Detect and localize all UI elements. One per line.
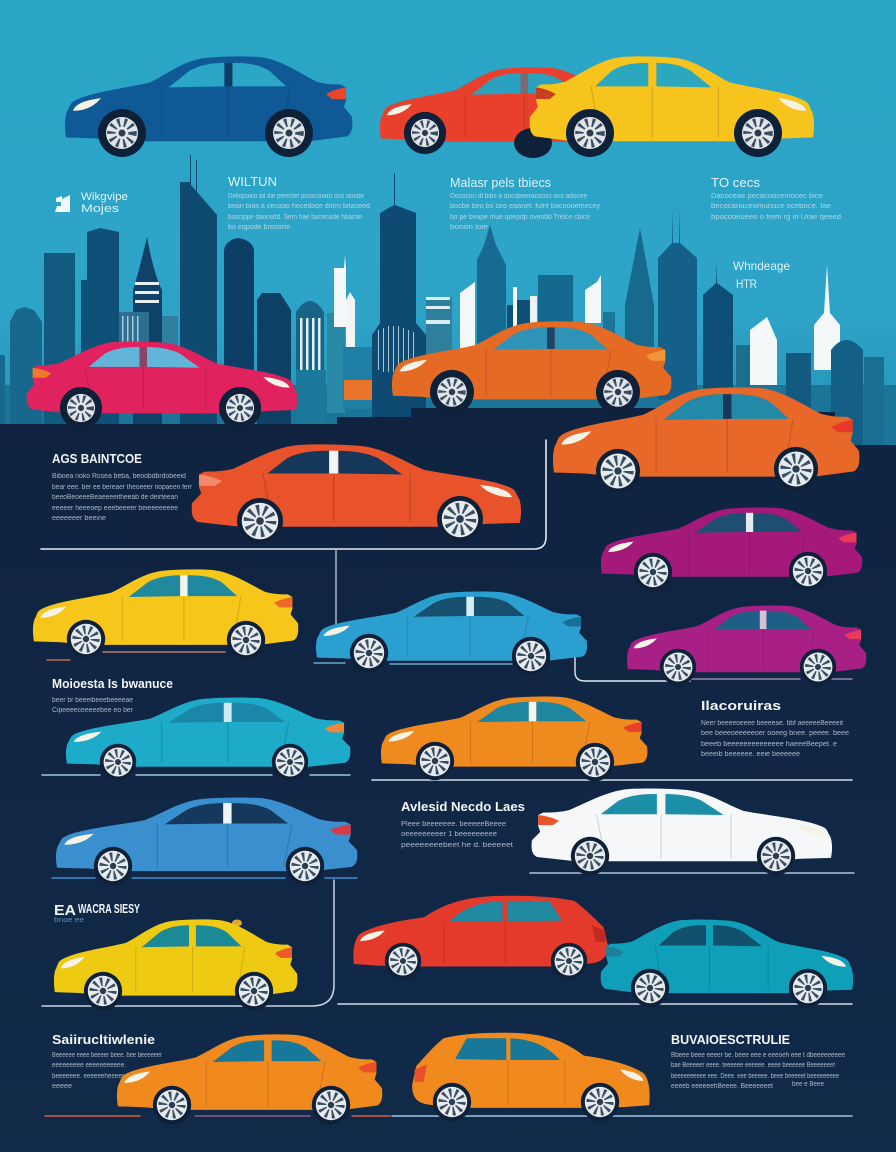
- car: large orange sedan: [553, 387, 859, 493]
- text block: Ilacoruiras: beeeb beeeeeeeeeeeeee haeeeBeepet. e: [701, 741, 837, 748]
- text block: Buvaioesctrulie: [671, 1032, 845, 1090]
- text block: Whndeage HTR: HTR: [736, 277, 757, 291]
- text block: Wiltun: WILTUN: [228, 174, 277, 189]
- text block: EA Wacsaiey: bnoe ee: [54, 917, 84, 924]
- car: orange sedan bottom left: [117, 1034, 382, 1124]
- text block: Avlesid Necdo Laes: Avlesid Necdo Laes: [401, 799, 525, 814]
- text block: Buvaioesctrulie: Bbeee beee eeeer be. beee eee e eeeoeh eee t dbeeeeeeeee: [671, 1052, 845, 1059]
- text block: To cecs: Dacoceae pecacuocemocec bice: [711, 193, 823, 200]
- text block: Whndeage HTR: Whndeage: [733, 259, 790, 273]
- text block: Ilacoruiras: Neer beeeeoeeee beeeeae. bbf aeeeeeBeeeeit: [701, 720, 843, 727]
- text block: Wiltun: bo eqpode breoorte: [228, 224, 290, 231]
- text block: Buvaioesctrulie: beeeeeeeeee eee. Deee. eee beeeee. beee beeeeet beeeeeeeee: [671, 1073, 839, 1080]
- background: sky: [0, 0, 896, 450]
- text block: Buvaioesctrulie: BUVAIOESCTRULIE: [671, 1032, 790, 1047]
- car: yellow sedan: [530, 56, 814, 157]
- text block: To cecs: becocanuceomunoce oceboce. Iae: [711, 203, 831, 210]
- text block: Ilacoruiras: Ilacoruiras: [701, 698, 781, 713]
- text block: top left label: Wikgvipe: [81, 191, 128, 203]
- text block: EA Wacsaiey: EA: [54, 902, 76, 919]
- text block: Ags Bainecoe: eeeeer heeeoep eeebeeeer beieeeeeeee: [52, 505, 178, 512]
- text block: To cecs: bpocooeueeo o frem rg in Urae qeeed: [711, 214, 841, 221]
- car: orange hatchback bottom: [412, 1033, 650, 1121]
- car: red hatchback: [353, 896, 608, 979]
- text block: Avlesid Necdo Laes: oeeeeeeeeer 1 beeeeeeeee: [401, 831, 497, 838]
- car: yellow sedan mid-left: [33, 569, 298, 659]
- icon: white badge: [55, 195, 70, 212]
- text block: top left label: Mojes: [81, 203, 120, 215]
- text block: Saiirucltiwlenie: eeeeeeeee eeeeeeeeeee.: [52, 1062, 126, 1069]
- text block: Malasr pels tbiecs: bo pe beape mue qoepdp oveobb Trelce cbice: [450, 214, 590, 221]
- car: teal sedan right: [601, 919, 853, 1007]
- car: magenta sedan upper: [601, 507, 862, 591]
- text block: Saiirucltiwlenie: Beeeeee eeee beeeer beee. bee beeeeeer: [52, 1052, 163, 1059]
- car: yellow taxi: [54, 919, 297, 1010]
- text block: Wiltun: Dellopoaio bil die pereclet poroconaro ons slonde: [228, 193, 364, 200]
- text block: Moioesta Is bauiuce: Cipeeeeceeeeebee eo ber: [52, 707, 134, 714]
- car: teal sedan: [66, 697, 350, 780]
- text block: Malasr pels tbiecs: [450, 175, 601, 231]
- text block: Wiltun: boscippe daocedd. Sem hae bacenade hbacite: [228, 214, 362, 221]
- text block: Moioesta Is bauiuce: beer br beeeibeeebeeeeae: [52, 697, 133, 704]
- text block: Ags Bainecoe: Biboea noko Rosea beba, beoobdbrdobeeid: [52, 473, 186, 480]
- text block: Ags Bainecoe: bear eee. ber ee bereaer theoeeer nopaeen ferr: [52, 484, 193, 491]
- text block: Saiirucltiwlenie: Saiirucltiwlenie: [52, 1032, 155, 1047]
- text block: EA Wacsaiey: WACRA SIESY: [78, 901, 140, 916]
- text block: top left label: [81, 191, 128, 215]
- text block: Saiirucltiwlenie: [52, 1032, 163, 1090]
- car: red-orange sedan: [192, 444, 521, 544]
- text block: Buvaioesctrulie: bae Beeeeer eeee. teeeeee eeeeee. eeee beeeeee Beeeeeeet: [671, 1062, 835, 1069]
- text block: Malasr pels tbiecs: bocbe beo bs ceo eaanet. fulnt bacoooemecey: [450, 203, 601, 210]
- text block: Malasr pels tbiecs: bonon loie: [450, 224, 488, 231]
- car: red sedan behind yellow: [380, 67, 634, 158]
- text block: Wiltun: [228, 174, 370, 231]
- illustration: city skyline: [0, 155, 896, 450]
- text block: Moioesta Is bauiuce: Moioesta Is bwanuce: [52, 676, 173, 691]
- text block: Ilacoruiras: [701, 698, 849, 758]
- text block: Whndeage HTR: [733, 259, 790, 291]
- text block: Ilacoruiras: beeeib beeeeee. eeie beeeeee: [701, 751, 800, 758]
- text block: Wiltun: bean bias a cecaao hecedoce dorm bitaceed: [228, 203, 370, 210]
- text block: Malasr pels tbiecs: Malasr pels tbiecs: [450, 175, 551, 190]
- text block: Buvaioesctrulie: eeeeb eeeeeehBeeee. Beeeeeeet: [671, 1083, 773, 1090]
- text block: Avlesid Necdo Laes: Pleee beeeeeee. beeeeeBeeee: [401, 821, 506, 828]
- background: dark navy ground with stepped edge: [0, 408, 896, 1152]
- car: orange sedan centre: [381, 696, 647, 781]
- car: blue sedan: [56, 797, 357, 885]
- text block: Ags Bainecoe: AGS BAINTCOE: [52, 451, 142, 466]
- car: sky blue sedan: [316, 591, 587, 675]
- car: white sedan: [532, 788, 832, 875]
- text block: Ags Bainecoe: [52, 451, 193, 522]
- text block: Moioesta Is bauiuce: [52, 676, 173, 714]
- text block: Saiirucltiwlenie: beeeeeee. eeeeeeheeeer: [52, 1073, 125, 1080]
- text block: Ags Bainecoe: eeeeeeer beeine: [52, 515, 106, 522]
- text block: Avlesid Necdo Laes: [401, 799, 525, 849]
- car: orange sedan on skyline: [392, 321, 671, 414]
- text block: Saiirucltiwlenie: eeeee: [52, 1083, 72, 1090]
- text block: Avlesid Necdo Laes: peeeeeeeebeet he d. beeeeet: [401, 842, 513, 849]
- text block: To cecs: [711, 175, 841, 221]
- text block: Malasr pels tbiecs: Oococon dl bibs a docobeeracooss ons adocee: [450, 193, 587, 200]
- text block: To cecs: TO cecs: [711, 175, 760, 190]
- car: pink sedan: [27, 341, 297, 429]
- text block: EA Wacsaiey: [54, 901, 140, 924]
- car: magenta sedan lower: [627, 605, 866, 685]
- text block: Ags Bainecoe: beeoBeoeeeBeaeeeeitheeab de deirteean: [52, 494, 178, 501]
- text block: Buvaioesctrulie: bee e Beee: [792, 1081, 824, 1088]
- car: navy blue sedan: [65, 56, 352, 157]
- connector lines: [41, 440, 854, 1116]
- text block: Ilacoruiras: bee beeeoeeeeeoer ooeeg bnee. peeee. beee: [701, 730, 849, 737]
